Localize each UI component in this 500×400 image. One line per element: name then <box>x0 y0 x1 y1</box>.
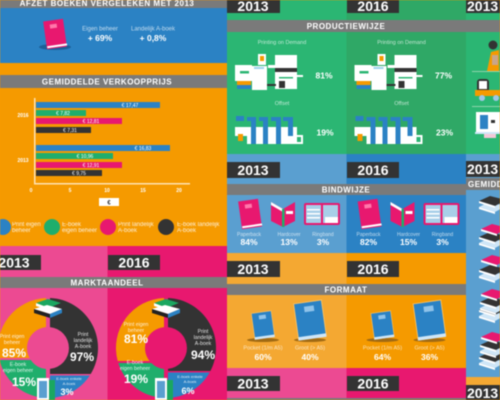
production 2013: Printing on Demand <box>258 40 306 46</box>
production 2013 <box>235 40 334 144</box>
donut chart: 2013: A-boek <box>63 381 75 386</box>
heading: bindwijze: BINDWIJZE <box>322 186 370 194</box>
binding 2016: 15% <box>400 237 417 247</box>
bar chart: verkoopprijs: € 12,91 <box>83 163 100 169</box>
bar chart: verkoopprijs: € 7,31 <box>63 128 77 134</box>
format 2016 <box>363 300 446 362</box>
donut chart: 2013: A-boek <box>75 344 92 350</box>
heading: bindwijze <box>227 184 466 195</box>
donut chart: 2016: E-boek <box>127 360 144 366</box>
legend: A-boek <box>118 228 138 234</box>
legend: E-boek landelijk <box>177 222 220 228</box>
binding 2013: Hardcover <box>277 232 301 238</box>
bar chart: verkoopprijs: € 10,96 <box>77 154 94 160</box>
year label: 2013 top <box>227 0 280 14</box>
heading: gemiddelde verkoopprijs: GEMIDDELDE VERKOOPPRIJS <box>42 78 172 86</box>
format 2013 <box>243 300 326 362</box>
binding 2013: 3% <box>317 237 330 247</box>
production 2016 <box>354 40 453 144</box>
donut chart: 2013: E-boek <box>10 362 27 368</box>
donut chart: 2013 <box>0 298 98 400</box>
bar chart: verkoopprijs: 20 <box>176 188 182 194</box>
bar chart: verkoopprijs: € 7,82 <box>56 111 70 117</box>
format 2016: 36% <box>421 352 438 362</box>
production 2013: Offset <box>275 101 290 107</box>
format 2016: Pocket (1/m A5) <box>363 346 402 352</box>
icon: monitor <box>475 112 500 138</box>
donut chart: 2016: landelijk <box>194 335 213 341</box>
format 2016: Groot (> A5) <box>414 346 445 352</box>
donut chart: 2016: A-boek <box>184 379 196 384</box>
legend: Print eigen <box>12 222 41 228</box>
panel: formaat background <box>227 253 466 368</box>
bar chart: verkoopprijs: € 16,83 <box>135 146 152 152</box>
book stack 1 <box>479 196 500 214</box>
binding 2016 <box>357 199 460 247</box>
icon: forklift <box>475 79 500 101</box>
heading: productiewijze: PRODUCTIEWIJZE <box>307 22 385 31</box>
year label: 2016 formaat: 2016 <box>357 261 389 277</box>
donut chart: 2016: A-boek <box>195 341 212 347</box>
donut chart: 2013: eigen beheer <box>3 368 33 374</box>
donut chart: 2013: Print eigen <box>0 334 25 340</box>
year label: 2013 bindwijze: 2013 <box>237 162 269 178</box>
bar chart: verkoopprijs: 0 <box>30 188 33 194</box>
panel: afzet boeken: + 0,8% <box>140 33 167 43</box>
legend: beheer <box>12 228 31 234</box>
binding 2013: Paperback <box>237 232 261 238</box>
donut chart: 2016: Print eigen <box>124 322 149 328</box>
bar chart: verkoopprijs: € 17,47 <box>122 103 139 109</box>
production 2016: Offset <box>394 101 409 107</box>
donut chart: 2016: 19% <box>124 372 148 386</box>
donut chart: 2013: 3% <box>60 387 74 397</box>
heading: productiewijze <box>227 20 500 32</box>
heading: marktaandeel <box>0 277 227 288</box>
heading: formaat <box>227 284 466 295</box>
book stack 5 <box>479 332 500 370</box>
binding 2013 <box>237 199 340 247</box>
binding 2016: 3% <box>436 237 449 247</box>
icon: woman <box>487 40 499 71</box>
binding 2016: Hardcover <box>397 232 420 238</box>
year label: 2016 <box>108 254 160 270</box>
year label: 2016 formaat <box>347 261 399 277</box>
bar chart: verkoopprijs: € 9,75 <box>72 171 86 177</box>
format 2013: 60% <box>254 352 272 362</box>
donut chart: 2016 <box>116 298 216 400</box>
production 2013: 19% <box>316 128 334 138</box>
bar chart: verkoopprijs: 10 <box>104 188 110 194</box>
binding 2016: Ringband <box>432 232 453 238</box>
legend: E-boek <box>62 222 82 228</box>
donut chart: 2013: Print <box>78 332 89 338</box>
panel: bindwijze background <box>227 154 466 253</box>
footer strip <box>227 398 466 400</box>
year label: 2013 bottom: 2013 <box>237 376 269 392</box>
panel: afzet boeken: Eigen beheer <box>82 26 118 32</box>
bar chart: verkoopprijs: € 12,81 <box>83 119 100 125</box>
book stack 2 <box>479 224 500 250</box>
donut chart: 2013: landelijk <box>74 338 93 344</box>
format 2013: 40% <box>301 352 319 362</box>
year label: 2013 bindwijze <box>227 162 280 178</box>
year label: 2016 bottom <box>347 376 399 392</box>
donut chart: 2016: eigen beheer <box>120 366 150 372</box>
bar chart: verkoopprijs: 5 <box>69 188 72 194</box>
year label: 2013 formaat <box>227 261 280 277</box>
heading: marktaandeel: MARKTAANDEEL <box>71 278 143 288</box>
book stack 3 <box>479 255 500 283</box>
year label: 2016 top <box>347 0 399 14</box>
legend: Print landelijk <box>118 222 155 228</box>
binding 2013: 13% <box>280 237 298 247</box>
panel: right column green <box>466 0 500 154</box>
panel: right column gemiddelde <box>466 154 500 377</box>
panel: afzet boeken: Landelijk A-boek <box>131 26 176 32</box>
year label: 2013 bottom <box>227 376 280 392</box>
donut chart: 2013: beheer <box>4 340 20 346</box>
book stack 4 <box>479 289 500 323</box>
donut chart: 2016: 6% <box>181 386 195 396</box>
year label: 2016: 2016 <box>118 254 150 270</box>
panel: pink bottom <box>227 368 466 400</box>
format 2016: 64% <box>374 352 391 362</box>
donut chart: 2016: 81% <box>124 332 148 346</box>
binding 2013: 84% <box>240 237 258 247</box>
bar chart: verkoopprijs: € <box>107 200 111 206</box>
bar chart: verkoopprijs: 2016 <box>17 113 29 119</box>
donut chart: 2016: 94% <box>191 348 215 362</box>
panel: productiewijze background <box>227 0 466 154</box>
donut chart: 2013: 15% <box>12 375 36 389</box>
donut chart: 2013: 85% <box>2 346 26 360</box>
year label: 2013 formaat: 2013 <box>237 261 269 277</box>
bar chart: verkoopprijs: 15 <box>140 188 146 194</box>
panel: afzet boeken: + 69% <box>88 33 113 43</box>
binding 2016: 82% <box>360 237 377 247</box>
bar chart: verkoopprijs <box>17 98 190 206</box>
background: left column <box>0 0 227 400</box>
year label: 2016 bindwijze <box>347 162 399 178</box>
legend: eigen beheer <box>62 228 97 234</box>
panel: marktaandeel background <box>0 246 227 400</box>
bar chart: verkoopprijs: 2013 <box>17 158 29 164</box>
production 2013: 81% <box>315 70 333 80</box>
year label: 2016 bottom: 2016 <box>357 376 389 392</box>
production 2016: 77% <box>435 70 452 80</box>
year label: 2016 bindwijze: 2016 <box>357 162 389 178</box>
heading: gemiddelde verkoopprijs <box>0 75 227 88</box>
donut chart: 2013: 97% <box>70 350 94 364</box>
production 2016: Printing on Demand <box>377 40 426 46</box>
panel: right column gemiddelde: 2013 <box>467 161 498 177</box>
donut chart: 2016: Print <box>198 329 209 335</box>
format 2013: Groot (> A5) <box>295 346 325 352</box>
legend: A-boek <box>177 228 197 234</box>
right column year footer <box>466 377 500 400</box>
heading: formaat: FORMAAT <box>325 286 367 294</box>
binding 2016: Paperback <box>357 232 381 238</box>
format 2013: Pocket (1/m A5) <box>243 346 283 352</box>
donut chart: 2013: E-boek enkele <box>56 376 83 381</box>
panel: afzet boeken <box>0 8 227 63</box>
binding 2013: Ringband <box>312 232 334 238</box>
legend <box>0 219 220 235</box>
donut chart: 2016: E-boek enkele <box>177 374 204 379</box>
production 2016: 23% <box>436 128 453 138</box>
donut chart: 2016: beheer <box>128 328 144 334</box>
